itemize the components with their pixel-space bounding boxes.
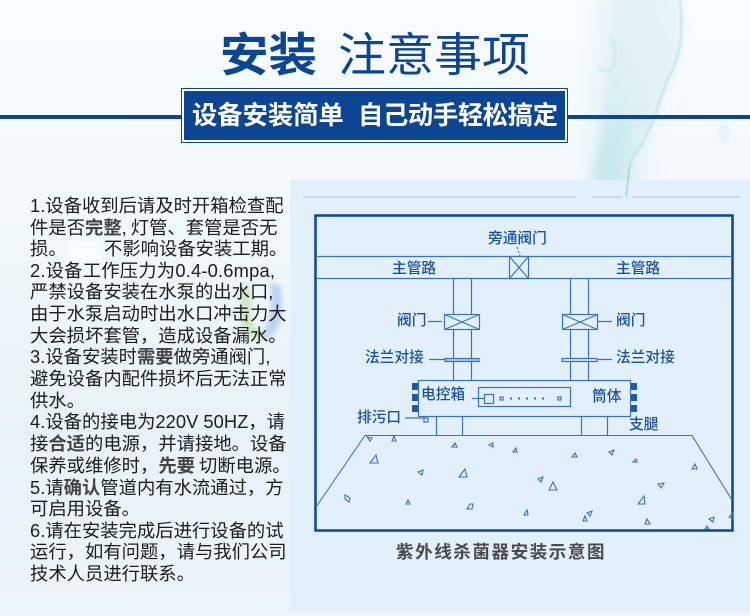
left branch pipe: [428, 279, 480, 380]
diagram caption: 紫外线杀菌器安装示意图: [396, 542, 606, 562]
subtitle banner: 设备安装简单: [192, 102, 344, 130]
title: regular part: 注意事项: [338, 29, 530, 81]
item 5: 可启用设备。: [30, 498, 140, 519]
item 3: [30, 346, 287, 411]
diagram labels: 阀门: [397, 312, 426, 329]
main pipeline: [316, 256, 732, 278]
title: [220, 29, 530, 81]
item 6: 运行，如有问题，请与我们公司: [30, 541, 287, 562]
subtitle banner: [182, 88, 568, 142]
installation diagram: [316, 216, 733, 530]
item 3: 3.设备安装时需要做旁通阀门,: [30, 346, 270, 367]
installation instructions text: [30, 195, 291, 584]
item 4: [30, 411, 291, 476]
item 2: [30, 260, 287, 346]
item 1: 不影响设备安装工期。: [104, 238, 287, 259]
diagram labels: 旁通阀门: [488, 229, 547, 247]
diagram labels: 主管路: [616, 259, 660, 277]
diagram frame: [316, 216, 732, 530]
item 1: 1.设备收到后请及时开箱检查配: [30, 195, 284, 216]
item 6: 6.请在安装完成后进行设备的试: [30, 520, 284, 541]
diagram labels: 法兰对接: [616, 349, 675, 366]
diagram labels: 法兰对接: [365, 349, 424, 366]
item 1: 损。: [30, 238, 67, 259]
faint line above diagram: [303, 196, 740, 198]
header divider rule right: [568, 115, 750, 119]
item 1: [30, 195, 287, 259]
item 2: 由于水泵启动时出水口冲击力大: [30, 303, 287, 324]
item 2: 严禁设备安装在水泵的出水口,: [30, 281, 273, 302]
title: bold part: 安装: [220, 29, 317, 81]
left ports: [412, 383, 418, 412]
diagram labels: 排污口: [357, 409, 401, 426]
water streak over panel: [626, 165, 630, 197]
item 2: 大会损坏套管，造成设备漏水。: [30, 325, 287, 346]
item 2: 2.设备工作压力为0.4-0.6mpa,: [30, 260, 275, 281]
decoration behind instructions: [68, 240, 282, 340]
sterilizer body: [418, 380, 630, 416]
item 4: 4.设备的接电为220V 50HZ，请: [30, 411, 285, 432]
diagram labels: 主管路: [392, 259, 436, 277]
support legs and drain: [405, 416, 608, 435]
diagram labels: 电控箱: [421, 386, 465, 403]
right ports: [631, 383, 637, 412]
diagram labels: 阀门: [616, 312, 645, 329]
item 6: [30, 520, 287, 584]
item 4: 接合适的电源，并请接地。设备: [30, 433, 287, 454]
subtitle banner: 自己动手轻松搞定: [358, 102, 558, 130]
item 3: 供水。: [30, 390, 85, 411]
item 5: [30, 477, 284, 519]
concrete foundation: [316, 436, 733, 529]
diagram labels: 筒体: [592, 388, 622, 405]
item 6: 技术人员进行联系。: [30, 563, 195, 584]
right panel background: [290, 180, 750, 612]
diagram labels: [357, 229, 675, 433]
item 5: 5.请确认管道内有水流通过，方: [30, 477, 284, 498]
header divider rule left: [0, 115, 182, 119]
item 3: 避免设备内配件损坏后无法正常: [30, 368, 287, 389]
diagram labels: 支腿: [629, 416, 659, 433]
item 4: 保养或维修时，先要切断电源。: [30, 455, 291, 476]
right branch pipe: [562, 279, 612, 380]
item 1: 件是否完整,灯管、套管是否无: [30, 217, 277, 238]
bypass valve: [510, 247, 528, 278]
